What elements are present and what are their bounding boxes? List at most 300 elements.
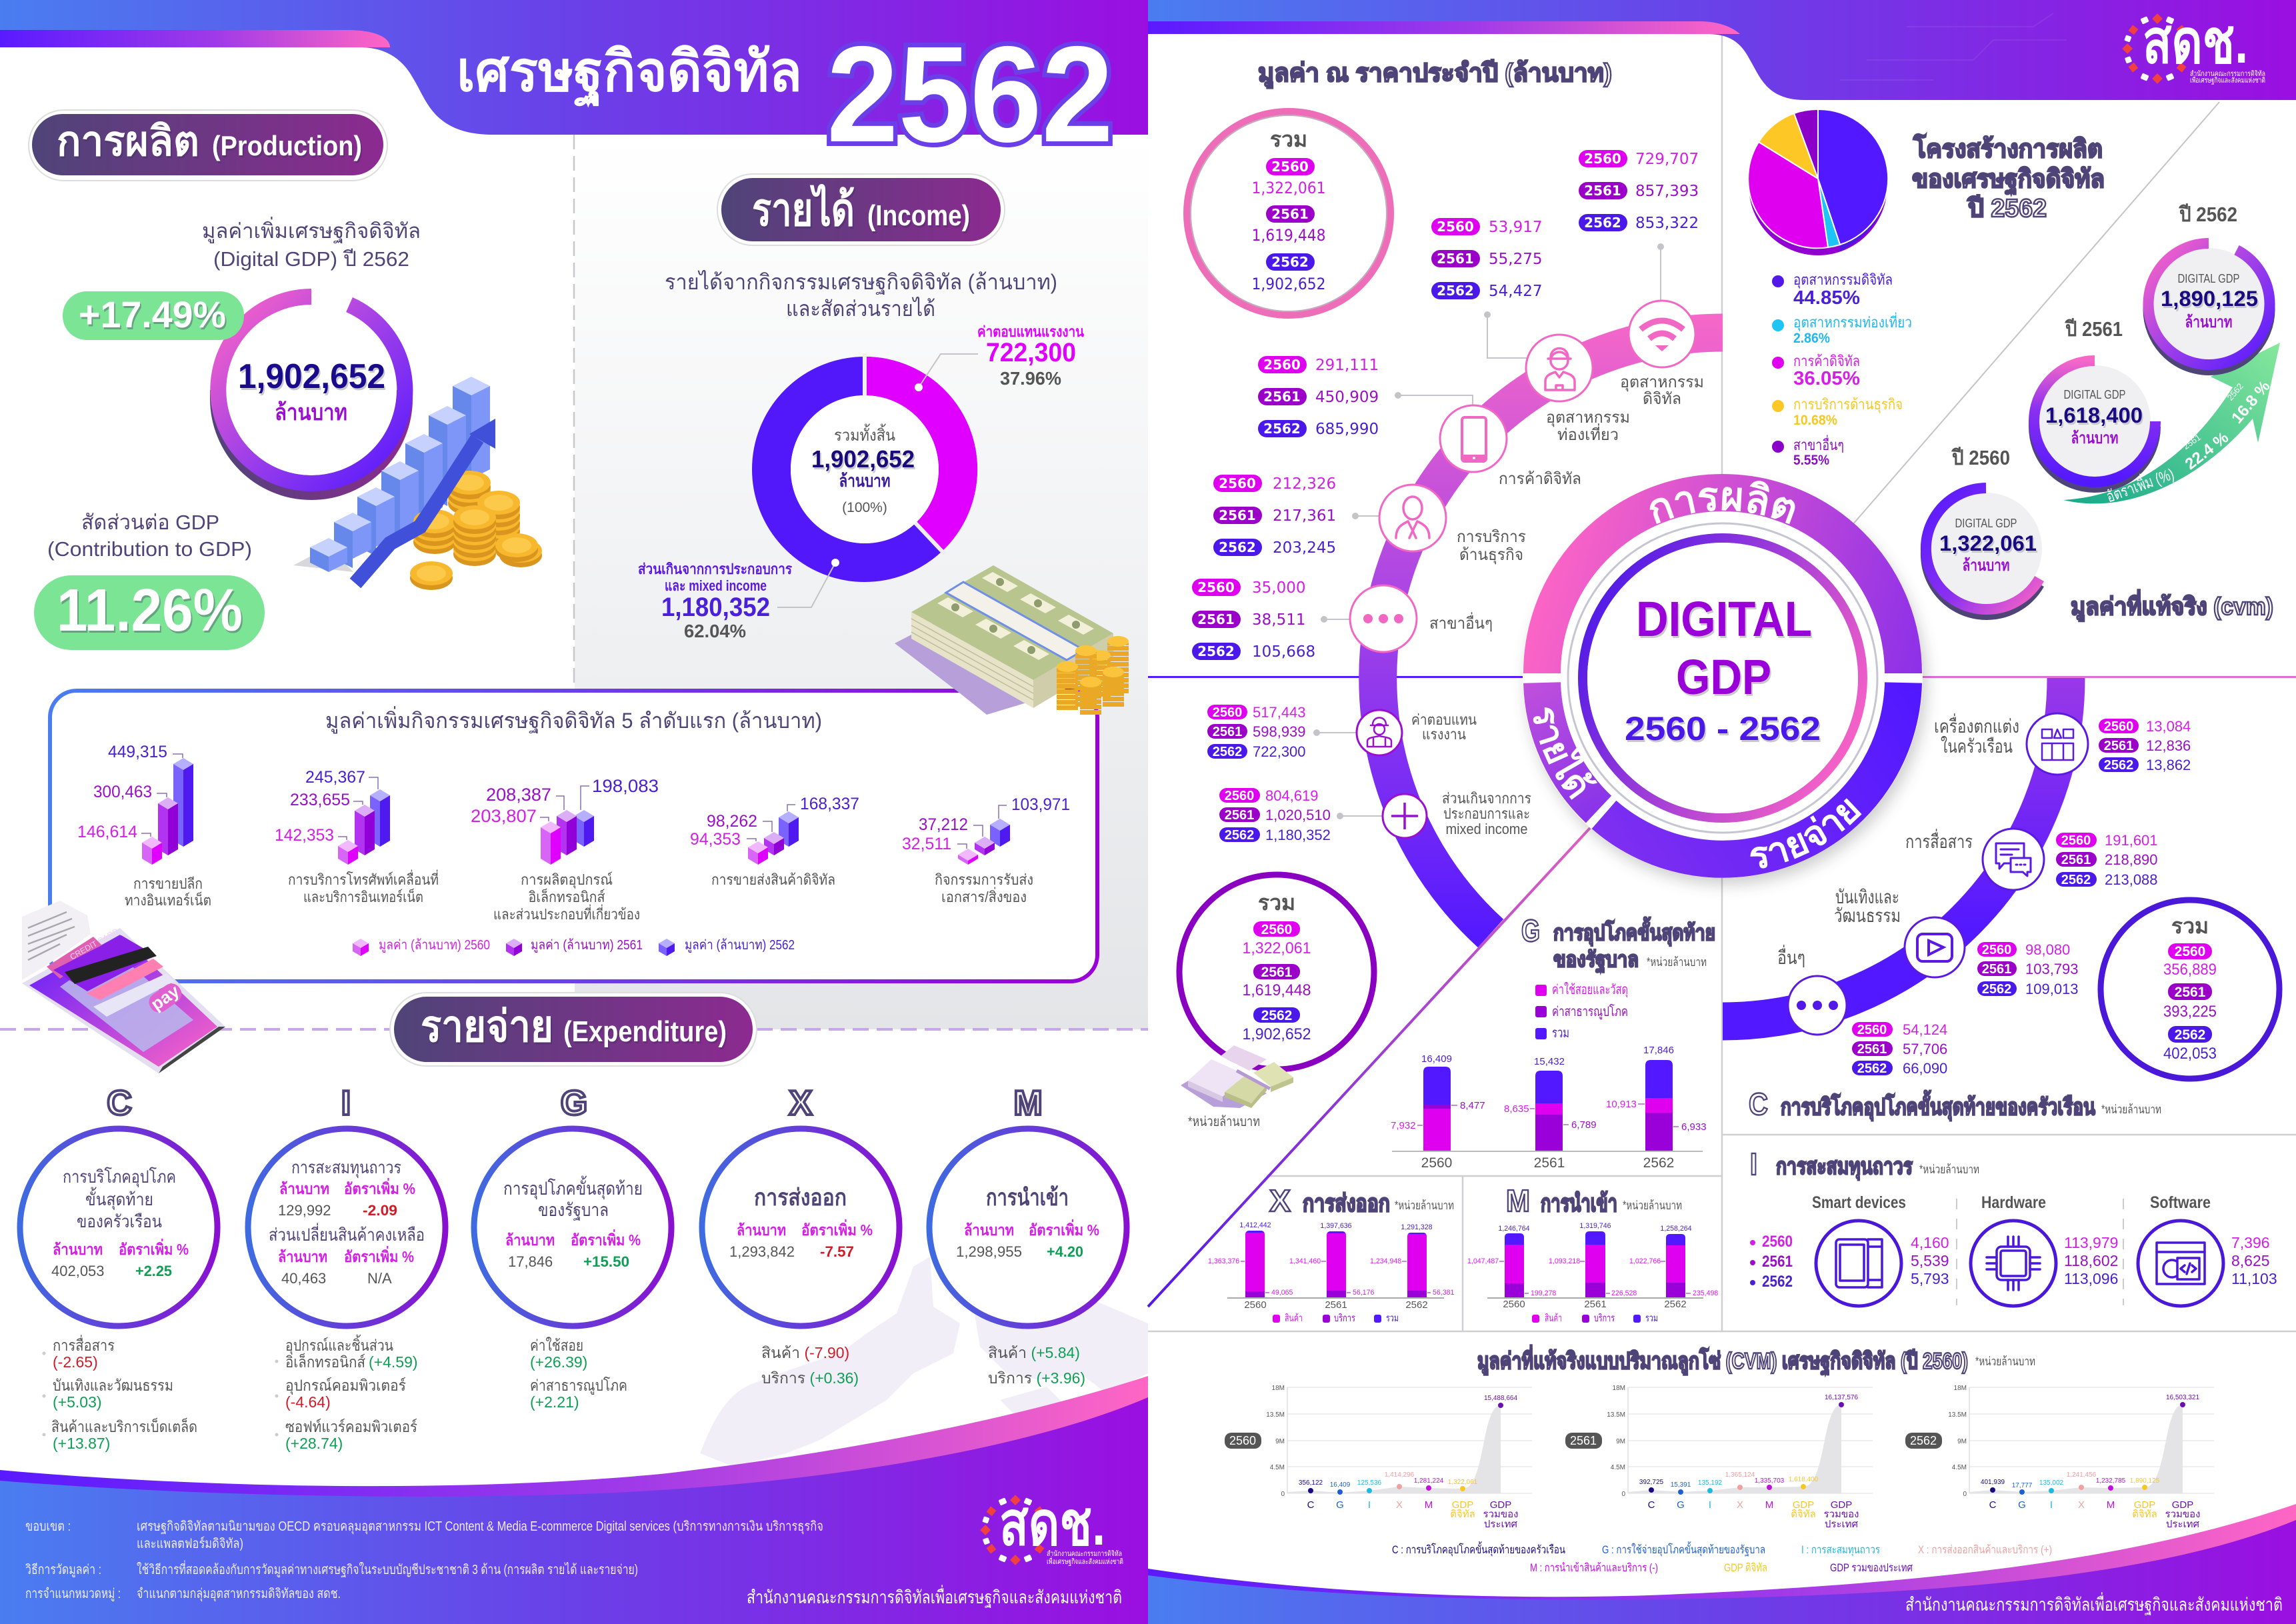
list X: สินค้า (-7.90)	[761, 1344, 849, 1361]
hub title: 2560 - 2562	[1625, 710, 1821, 747]
area chart 2562: 2562	[1910, 1434, 1937, 1447]
area chart 2561: 1,335,703	[1755, 1477, 1785, 1485]
cvm ring 2561: ปี 2561	[2065, 317, 2123, 341]
bars G: 10,913	[1606, 1099, 1637, 1110]
cvm ring 2562: DIGITAL GDP	[2177, 272, 2240, 285]
area chart 2562: 401,939	[1981, 1479, 2005, 1486]
area chart 2561: 15,391	[1671, 1481, 1691, 1489]
smart devices	[1812, 1193, 1949, 1306]
year key: 2560	[1762, 1233, 1793, 1251]
numbers: communication: 191,601	[2105, 832, 2158, 849]
heading I: I	[1750, 1147, 1757, 1181]
pie title: ปี 2562	[1967, 195, 2047, 223]
label: compensation: 37.96%	[1000, 368, 1061, 389]
label: compensation	[1411, 711, 1477, 743]
bars: electronics manufacturing: และส่วนประกอบที่เกี่ยวข้อง	[493, 904, 640, 923]
digital gdp heading	[202, 217, 421, 271]
area chart 2560	[1225, 1385, 1532, 1530]
smart devices: 5,793	[1911, 1270, 1949, 1287]
area chart 2560: C	[1307, 1499, 1315, 1511]
bars: electronics manufacturing	[471, 776, 659, 923]
list G: (+26.39)	[530, 1353, 587, 1371]
bars X: 49,065	[1271, 1289, 1293, 1297]
cvm ring 2561: ล้านบาท	[2071, 429, 2119, 447]
circle X text	[729, 1185, 873, 1260]
area chart 2562: 1,232,785	[2096, 1477, 2126, 1485]
circle M text	[956, 1185, 1099, 1260]
total circle: expenditure	[2101, 900, 2279, 1079]
bars: electronics manufacturing: อิเล็กทรอนิกส์	[528, 887, 605, 905]
label: communication: การสื่อสาร	[1905, 829, 1973, 852]
numbers: compensation: 2560	[1213, 705, 1242, 720]
bars: digital wholesale	[690, 795, 859, 888]
area chart 2561: C	[1648, 1499, 1655, 1511]
title year: 2562	[827, 18, 1113, 171]
numbers: household furnishing: 12,836	[2146, 737, 2191, 754]
list C: การสื่อสาร	[53, 1335, 115, 1354]
label: mixed income: mixed income	[1445, 821, 1528, 837]
heading pill: income: รายได้	[752, 183, 855, 235]
label: compensation: ค่าตอบแทน	[1411, 711, 1477, 728]
world map background	[700, 1257, 1148, 1467]
chart: government consumption	[1391, 913, 1715, 1171]
icon: banknotes	[1181, 1045, 1293, 1108]
area chart 2562: 18M	[1954, 1385, 1967, 1392]
leader lines	[1313, 243, 1664, 819]
logo: สดช.	[2143, 8, 2248, 76]
numbers: compensation: 517,443	[1253, 704, 1306, 721]
bars: parcel delivery: เอกสาร/สิ่งของ	[941, 887, 1027, 905]
total circle: production: 2562	[1271, 254, 1309, 270]
label: mixed income: ส่วนเกินจากการประกอบการ	[638, 561, 792, 577]
cvm ring 2561: DIGITAL GDP	[2064, 388, 2125, 401]
numbers: tourism	[1431, 218, 1542, 300]
bars X: 1,412,442	[1239, 1221, 1271, 1229]
bars: parcel delivery: 32,511	[902, 835, 951, 853]
area chart 2561: ดิจิทัล	[1791, 1509, 1816, 1520]
right footer	[1148, 1504, 2296, 1624]
bars: digital wholesale: 168,337	[800, 795, 859, 813]
bars G: 16,409	[1421, 1053, 1452, 1065]
logo: สำนักงานคณะกรรมการดิจิทัล	[2190, 70, 2265, 78]
right page grid lines	[1148, 34, 2296, 1331]
left footer	[0, 1376, 1148, 1624]
area chart 2561: 1,618,400	[1789, 1476, 1819, 1483]
organisation name: สำนักงานคณะกรรมการดิจิทัลเพื่อเศรษฐกิจและสังคมแห่งชาติ	[747, 1585, 1122, 1608]
numbers: business services: 2562	[1219, 539, 1256, 555]
software: Software	[2150, 1193, 2211, 1212]
bars M: 226,528	[1611, 1289, 1637, 1297]
chart legend G	[1535, 982, 1628, 1041]
numbers: digital industry: 729,707	[1635, 151, 1699, 168]
numbers: other spending: 2561	[1857, 1042, 1887, 1057]
area chart 2562: รวมของ	[2165, 1509, 2200, 1520]
panel: production	[29, 110, 542, 650]
numbers: other sectors: 35,000	[1252, 579, 1305, 597]
cvm ring 2560: 1,322,061	[1939, 531, 2037, 555]
numbers: household furnishing: 13,862	[2146, 757, 2191, 773]
area chart 2562: I	[2050, 1499, 2053, 1511]
circle C text: ขั้นสุดท้าย	[85, 1187, 153, 1210]
circle I text: ล้านบาท	[278, 1248, 327, 1265]
icon: phone and cards: pay	[147, 981, 183, 1014]
list C: บันเทิงและวัฒนธรรม	[53, 1377, 173, 1394]
label: digital industry: อุตสาหกรรม	[1620, 373, 1704, 392]
circle I text: ล้านบาท	[279, 1180, 329, 1197]
area chart 2560: I	[1368, 1499, 1371, 1511]
total circle: income: 1,322,061	[1243, 939, 1311, 957]
label: compensation: ค่าตอบแทนแรงงาน	[977, 323, 1084, 340]
circle G text: อัตราเพิ่ม %	[571, 1229, 641, 1249]
pie legend: 36.05%	[1793, 368, 1860, 389]
cvm legend: GDP ดิจิทัล	[1724, 1561, 1767, 1574]
list C: (+5.03)	[53, 1393, 102, 1411]
numbers: communication: 218,890	[2105, 851, 2158, 868]
bars X	[1208, 1221, 1455, 1324]
area chart 2562: 1,241,456	[2067, 1471, 2097, 1479]
numbers: other sectors: 2561	[1197, 611, 1235, 627]
icon: kitchen	[2027, 713, 2088, 775]
area chart 2562: GDP	[2134, 1499, 2155, 1511]
area chart 2561: 18M	[1613, 1385, 1625, 1392]
circle X	[702, 1129, 899, 1326]
total circle: production: 2561	[1271, 206, 1309, 222]
cvm ring 2562: ปี 2562	[2179, 203, 2237, 226]
circle I	[248, 1129, 445, 1326]
area chart 2562: 13.5M	[1948, 1411, 1967, 1419]
numbers: compensation: 2562	[1213, 745, 1242, 759]
year key: 2562	[1762, 1273, 1793, 1291]
numbers: entertainment	[1977, 941, 2079, 997]
area chart 2560: 16,409	[1330, 1481, 1351, 1489]
circle C text: ของครัวเรือน	[77, 1211, 162, 1231]
area chart 2561: G	[1677, 1499, 1685, 1511]
area chart 2561: 13.5M	[1607, 1411, 1625, 1419]
cvm legend: G : การใช้จ่ายอุปโภคขั้นสุดท้ายของรัฐบาล	[1602, 1541, 1765, 1557]
panel: expenditure X	[702, 1084, 899, 1387]
numbers: other sectors: 38,511	[1252, 611, 1305, 629]
icon: wifi	[1629, 301, 1695, 367]
area chart 2562: 9M	[1957, 1438, 1967, 1445]
pie title: ของเศรษฐกิจดิจิทัล	[1912, 165, 2105, 195]
chart legend G: รวม	[1552, 1026, 1569, 1041]
label: compensation: 722,300	[986, 338, 1076, 367]
numbers: tourism: 2561	[1437, 251, 1474, 267]
contribution heading: (Contribution to GDP)	[47, 537, 252, 561]
icon: plus	[1383, 794, 1427, 838]
area chart 2562: 135,002	[2039, 1479, 2064, 1487]
hub title: DIGITAL	[1636, 591, 1812, 647]
bars G: 6,789	[1571, 1119, 1597, 1131]
icon: business person	[1379, 485, 1446, 551]
panel: income background	[575, 135, 1148, 1029]
list X: บริการ (+0.36)	[761, 1369, 859, 1387]
circle I text: 129,992	[278, 1202, 331, 1219]
pie legend: การบริการด้านธุรกิจ	[1793, 396, 1903, 413]
circle I text	[269, 1157, 425, 1287]
area chart 2561: 0	[1621, 1491, 1625, 1498]
hardware	[1971, 1193, 2118, 1306]
label: household furnishing: ในครัวเรือน	[1941, 735, 2013, 757]
circle M text: +4.20	[1047, 1243, 1083, 1260]
total circle: expenditure: 2562	[2175, 1027, 2205, 1043]
panel: top five activities	[50, 691, 1097, 981]
heading I	[1750, 1147, 1979, 1181]
numbers: household furnishing: 2561	[2104, 739, 2133, 753]
pie title	[1912, 133, 2105, 223]
label: digital industry	[1620, 373, 1704, 408]
circle C text: +2.25	[135, 1263, 172, 1279]
circle I text: N/A	[367, 1270, 392, 1287]
software	[2138, 1193, 2277, 1306]
total circle: expenditure: 2561	[2175, 985, 2206, 1000]
digital gdp heading: (Digital GDP) ปี 2562	[213, 247, 409, 271]
bars G: 8,477	[1460, 1100, 1485, 1111]
area chart 2561: 2561	[1570, 1434, 1597, 1447]
software: 11,103	[2231, 1270, 2277, 1287]
numbers: other spending	[1852, 1021, 1947, 1077]
circle X text: 1,293,842	[729, 1243, 795, 1260]
contribution heading	[47, 511, 252, 561]
numbers: compensation	[1207, 704, 1306, 760]
cvm growth arrow: อัตราเพิ่ม (%)	[2103, 463, 2177, 506]
numbers: mixed income: 1,180,352	[1265, 827, 1331, 843]
footer notes: วิธีการวัดมูลค่า :	[25, 1563, 101, 1578]
gauge ring: ล้านบาท	[275, 400, 347, 425]
cvm ring 2562	[2149, 203, 2270, 370]
letter X: X	[789, 1084, 813, 1123]
area chart 2562: ประเทศ	[2166, 1519, 2200, 1530]
panel: capital formation	[1750, 1147, 2277, 1306]
numbers: mixed income: 2561	[1225, 808, 1254, 823]
smart devices: 4,160	[1911, 1234, 1949, 1251]
chart: imports	[1467, 1183, 1718, 1324]
cvm growth arrow: 16.8 %	[2228, 377, 2274, 427]
area chart 2560: 4.5M	[1270, 1464, 1285, 1471]
chart legend: มูลค่า (ล้านบาท) 2561	[531, 938, 643, 953]
year key: 2561	[1762, 1253, 1793, 1271]
bars: digital wholesale: 94,353	[690, 830, 741, 849]
icon: phone and cards	[22, 901, 225, 1073]
list I	[275, 1335, 418, 1452]
icon: bars and coins	[293, 377, 542, 590]
label: tourism: อุตสาหกรรม	[1546, 409, 1630, 427]
total circle: production: 2560	[1271, 159, 1309, 175]
list M: สินค้า (+5.84)	[988, 1344, 1080, 1361]
list C	[43, 1335, 197, 1452]
footer notes: ใช้วิธีการที่สอดคล้องกับการวัดมูลค่าทางเศรษฐกิจในระบบบัญชีประชาชาติ 3 ด้าน (การผลิต รายได้ และรายจ่าย)	[137, 1560, 638, 1578]
bars M: 1,319,746	[1579, 1222, 1611, 1230]
numbers: communication	[2056, 832, 2158, 888]
label: mixed income: ประกอบการและ	[1443, 805, 1530, 822]
bars: internet retail: การขายปลีก	[133, 875, 203, 892]
label: entertainment	[1834, 887, 1901, 926]
cvm legend: C : การบริโภคอุปโภคขั้นสุดท้ายของครัวเรือน	[1392, 1541, 1565, 1557]
circle I text: อัตราเพิ่ม %	[344, 1245, 414, 1265]
heading I: *หน่วยล้านบาท	[1919, 1163, 1979, 1176]
pie legend: 10.68%	[1793, 413, 1837, 428]
area chart 2560: GDP	[1490, 1499, 1511, 1511]
left header band	[0, 0, 1148, 171]
heading M: การนำเข้า	[1541, 1189, 1617, 1217]
total circle: production: รวม	[1270, 127, 1307, 151]
donut chart: (100%)	[842, 500, 887, 515]
numbers: other spending: 57,706	[1903, 1041, 1947, 1057]
area chart 2562: GDP	[2172, 1499, 2193, 1511]
area chart 2562: 16,503,321	[2166, 1394, 2199, 1401]
total circle: income: รวม	[1258, 891, 1295, 915]
growth badge: +17.49%	[79, 293, 226, 335]
numbers: digital commerce: 685,990	[1315, 421, 1379, 438]
cvm growth arrow: 22.4 %	[2182, 429, 2232, 473]
footer notes: เศรษฐกิจดิจิทัลตามนิยามของ OECD ครอบคลุมอุตสาหกรรม ICT Content & Media E-commerce Digital services (บริการทางการเงิน บริการธุรกิจ	[137, 1519, 823, 1535]
circle I text: อัตราเพิ่ม %	[344, 1177, 415, 1197]
cvm ring 2560: ล้านบาท	[1963, 557, 2009, 575]
numbers: tourism: 2560	[1437, 219, 1474, 235]
label: household furnishing: เครื่องตกแต่ง	[1934, 713, 2019, 737]
cvm chain heading: มูลค่าที่แท้จริงแบบปริมาณลูกโซ่ (CVM) เศรษฐกิจดิจิทัล (ปี 2560)	[1477, 1345, 1968, 1376]
pie legend: สาขาอื่นๆ	[1793, 435, 1844, 453]
legend M: สินค้า	[1545, 1313, 1562, 1324]
footer notes: การจำแนกหมวดหมู่ :	[25, 1587, 121, 1602]
circle X text: การส่งออก	[754, 1185, 847, 1211]
list I: อุปกรณ์คอมพิวเตอร์	[285, 1377, 406, 1395]
logo: สดช.	[999, 1490, 1105, 1558]
list C: (-2.65)	[53, 1353, 98, 1371]
chart legend	[353, 938, 795, 956]
chart title: มูลค่าเพิ่มกิจกรรมเศรษฐกิจดิจิทัล 5 ลำดับแรก (ล้านบาท)	[325, 706, 822, 734]
list C: สินค้าและบริการเบ็ดเตล็ด	[51, 1417, 197, 1435]
label: mixed income: ส่วนเกินจากการ	[1442, 790, 1531, 807]
logo: เพื่อเศรษฐกิจและสังคมแห่งชาติ	[2190, 75, 2265, 85]
cvm legend: GDP รวมของประเทศ	[1830, 1561, 1913, 1574]
area chart 2561: 135,192	[1698, 1479, 1723, 1487]
software: 7,396	[2231, 1234, 2270, 1251]
heading M: *หน่วยล้านบาท	[1623, 1199, 1682, 1212]
icon: other	[1350, 585, 1417, 652]
year key	[1750, 1233, 1793, 1291]
bars M: 235,498	[1693, 1289, 1718, 1297]
circle G text: ล้านบาท	[505, 1231, 555, 1249]
heading pill: expenditure	[390, 993, 757, 1066]
bars G: 2562	[1643, 1155, 1674, 1171]
area chart 2562: 0	[1963, 1491, 1967, 1498]
area chart 2561: 392,725	[1639, 1479, 1664, 1486]
chart heading G: G	[1521, 913, 1540, 948]
bars M: 2560	[1503, 1299, 1525, 1310]
icon: play	[1905, 917, 1965, 977]
total circle: income: 2562	[1261, 1008, 1292, 1023]
gauge ring	[210, 297, 413, 500]
numbers: digital industry: 2560	[1584, 151, 1621, 167]
area chart 2562: 4.5M	[1952, 1464, 1967, 1471]
circle G text: 17,846	[508, 1253, 553, 1270]
area chart 2560: 1,281,224	[1414, 1477, 1444, 1485]
area chart 2561: GDP	[1831, 1499, 1852, 1511]
area chart 2560: 18M	[1272, 1385, 1285, 1392]
numbers: entertainment: 98,080	[2025, 941, 2070, 958]
bars: telecom services	[275, 768, 439, 905]
bars X: 1,234,948	[1370, 1257, 1401, 1265]
pie title: โครงสร้างการผลิต	[1913, 133, 2103, 163]
area chart 2562: ดิจิทัล	[2132, 1509, 2157, 1520]
area chart 2560: X	[1396, 1499, 1403, 1511]
label: mixed income: และ mixed income	[665, 577, 767, 594]
cvm ring 2560: DIGITAL GDP	[1955, 517, 2017, 530]
numbers: digital commerce	[1258, 356, 1379, 438]
circle C text: การบริโภคอุปโภค	[63, 1167, 176, 1187]
footer notes: ขอบเขต :	[25, 1519, 71, 1534]
bars X: 2562	[1405, 1299, 1428, 1311]
circle C text	[51, 1167, 189, 1279]
numbers: compensation: 2561	[1213, 725, 1242, 739]
numbers: entertainment: 2560	[1982, 943, 2011, 957]
heading M: M	[1506, 1183, 1530, 1218]
total circle: expenditure: 356,889	[2163, 961, 2217, 979]
area chart 2561: 16,137,576	[1825, 1394, 1858, 1401]
legend X: รวม	[1386, 1313, 1399, 1324]
hardware: Hardware	[1981, 1193, 2046, 1212]
panel: income	[638, 174, 1084, 641]
cvm ring 2561: 1,618,400	[2045, 403, 2143, 427]
numbers: tourism: 53,917	[1489, 219, 1542, 236]
panel: expenditure I	[248, 1084, 445, 1452]
cvm legend: M : การนำเข้าสินค้าและบริการ (-)	[1530, 1561, 1658, 1574]
numbers: digital industry: 2562	[1584, 215, 1621, 231]
bars: parcel delivery: กิจกรรมการรับส่ง	[935, 871, 1033, 888]
unit note: *หน่วยล้านบาท	[1188, 1115, 1260, 1129]
icon: money stack	[895, 565, 1129, 715]
numbers: business services: 212,326	[1273, 475, 1336, 493]
total circle: production: 1,322,061	[1252, 179, 1325, 197]
numbers: business services: 217,361	[1273, 507, 1336, 525]
pie legend	[1772, 271, 1912, 468]
bars M	[1467, 1222, 1718, 1324]
bars: digital wholesale: การขายส่งสินค้าดิจิทัล	[711, 871, 835, 888]
chart legend G: ค่าสาธารณูปโภค	[1552, 1004, 1628, 1020]
circle M text: อัตราเพิ่ม %	[1029, 1219, 1099, 1239]
heading pill: expenditure: รายจ่าย	[421, 1001, 553, 1051]
bars: parcel delivery: 37,212	[919, 815, 968, 834]
list I: (-4.64)	[285, 1393, 331, 1411]
numbers: business services	[1213, 475, 1336, 557]
bars M: 2562	[1664, 1299, 1687, 1310]
bars M: 1,047,487	[1467, 1257, 1499, 1265]
cvm legend: X : การส่งออกสินค้าและบริการ (+)	[1918, 1543, 2052, 1556]
numbers: compensation: 722,300	[1253, 743, 1306, 760]
numbers: tourism: 54,427	[1489, 283, 1542, 300]
bars: telecom services: และบริการอินเทอร์เน็ต	[303, 887, 423, 905]
numbers: digital industry	[1579, 150, 1699, 232]
bars: telecom services: 245,367	[305, 768, 365, 787]
list X	[761, 1344, 859, 1387]
numbers: other sectors	[1192, 579, 1315, 661]
list I: อิเล็กทรอนิกส์	[285, 1352, 365, 1371]
list G: (+2.21)	[530, 1393, 579, 1411]
gauge ring: 1,902,652	[238, 357, 385, 396]
numbers: other sectors: 2562	[1197, 643, 1235, 659]
chart heading G: ของรัฐบาล	[1553, 947, 1639, 973]
numbers: mixed income: 2560	[1225, 789, 1254, 803]
circle C text: ล้านบาท	[53, 1241, 103, 1258]
total circle: expenditure: 2560	[2175, 944, 2205, 959]
title: เศรษฐกิจดิจิทัล	[457, 40, 802, 108]
area chart 2562: 17,777	[2012, 1482, 2033, 1489]
total circle: income: 2561	[1261, 965, 1293, 980]
hub title: GDP	[1676, 649, 1771, 705]
area chart 2560: 356,122	[1299, 1479, 1323, 1487]
bars G: 8,635	[1504, 1103, 1529, 1115]
